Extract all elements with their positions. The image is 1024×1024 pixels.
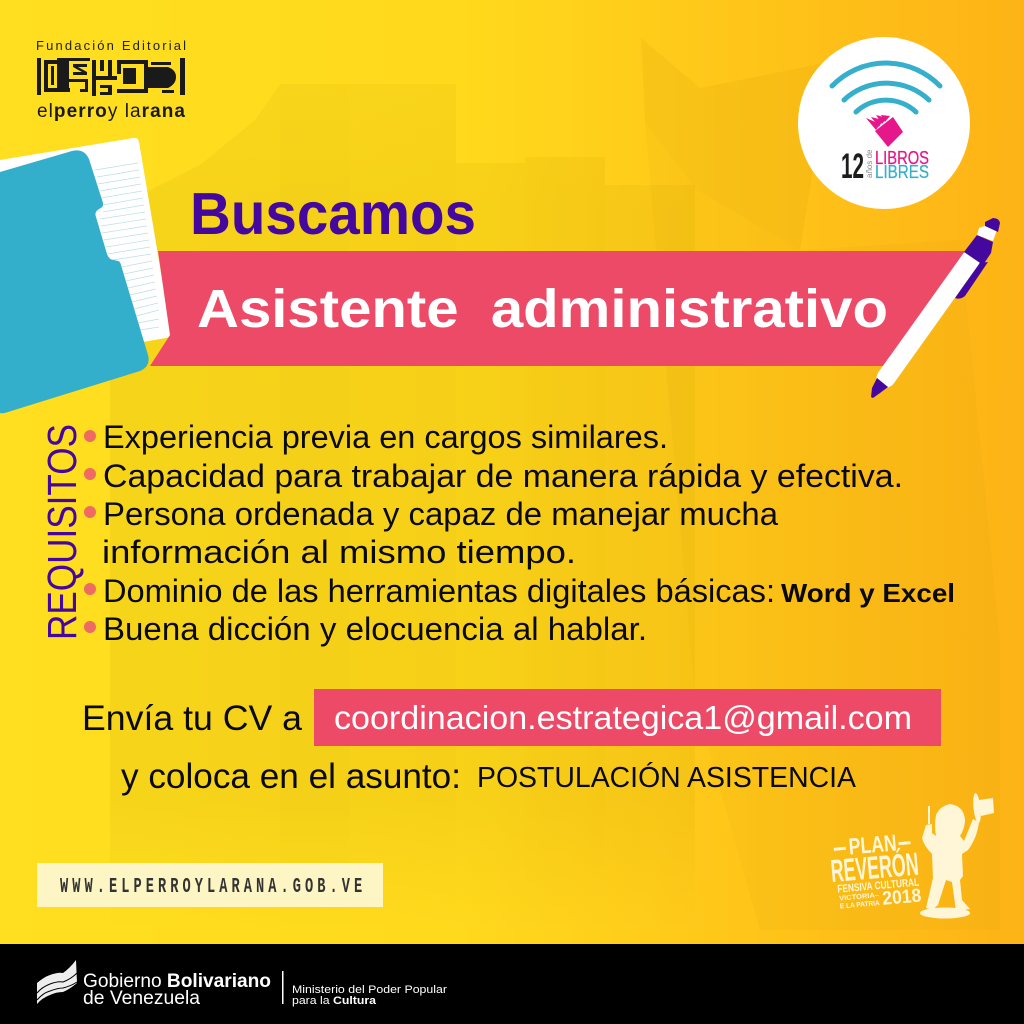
logo: Plan Reverón: REVERÓN [829,846,920,889]
badge text: 12 [841,147,864,186]
requirements list: Persona ordenada y capaz de manejar mucha [103,496,778,532]
requirements list: Capacidad para trabajar de manera rápida y efectiva. [103,458,903,494]
logo: Plan Reverón: E LA PATRIA [840,900,880,911]
logo: Plan Reverón: PLAN [848,829,898,860]
subject line [121,757,857,796]
email box [314,689,941,746]
logo: Plan Reverón: FENSIVA CULTURAL [837,877,920,896]
logo: Fundación Editorial el perro y la rana [36,38,186,122]
send CV line: Envía tu CV a [82,699,303,738]
requirements list: Experiencia previa en cargos similares. [103,419,668,455]
banner title: Asistente administrativo [197,279,888,339]
logo: Plan Reverón: 2018 [881,885,922,910]
government name [83,971,271,1009]
logo: Plan Reverón [828,793,994,918]
logo: Plan Reverón: VICTORIA– [839,892,879,903]
icon: pen [871,218,1000,398]
government name: de Venezuela [83,988,200,1009]
requirements list: Word y Excel [781,578,955,608]
icon: conductor figure [920,793,994,918]
circular badge: 12 años de libros libres: años de [865,149,874,178]
red banner [150,251,968,366]
vertical label: REQUISITOS: REQUISITOS [39,424,85,640]
email box: coordinacion.estrategica1@gmail.com [334,699,912,736]
logo: Fundación Editorial el perro y la rana: Fundación Editorial [36,38,186,53]
bullets [84,430,96,633]
website box [37,863,383,907]
ministry name: Ministerio del Poder Popular [292,984,447,996]
ministry name [292,984,447,1007]
blue folder [0,150,149,413]
logo wordmark: elperroy larana [37,101,185,122]
icon: waving flag [37,960,77,1004]
government name: Gobierno Bolivariano [83,971,271,992]
ministry name: para la Cultura [292,995,377,1007]
logo glyph [37,58,185,96]
heading: Buscamos: Buscamos [190,181,476,247]
footer bar [0,944,1024,1024]
subject line: y coloca en el asunto: [121,757,461,796]
paper sheet [0,138,171,380]
requirements list: Dominio de las herramientas digitales básicas: [103,573,775,609]
icon: wifi arcs [832,63,940,112]
icon: pink book [866,115,903,147]
website box: WWW.ELPERROYLARANA.GOB.VE [60,875,362,899]
circular badge: 12 años de libros libres [798,37,970,209]
requirements list: Buena dicción y elocuencia al hablar. [103,611,647,647]
requirements list: información al mismo tiempo. [102,534,576,570]
subject line: POSTULACIÓN ASISTENCIA [477,761,857,794]
circular badge: 12 años de libros libres: LIBRES [875,162,929,182]
circular badge: 12 años de libros libres: LIBROS [875,148,929,168]
requirements list [84,419,955,647]
